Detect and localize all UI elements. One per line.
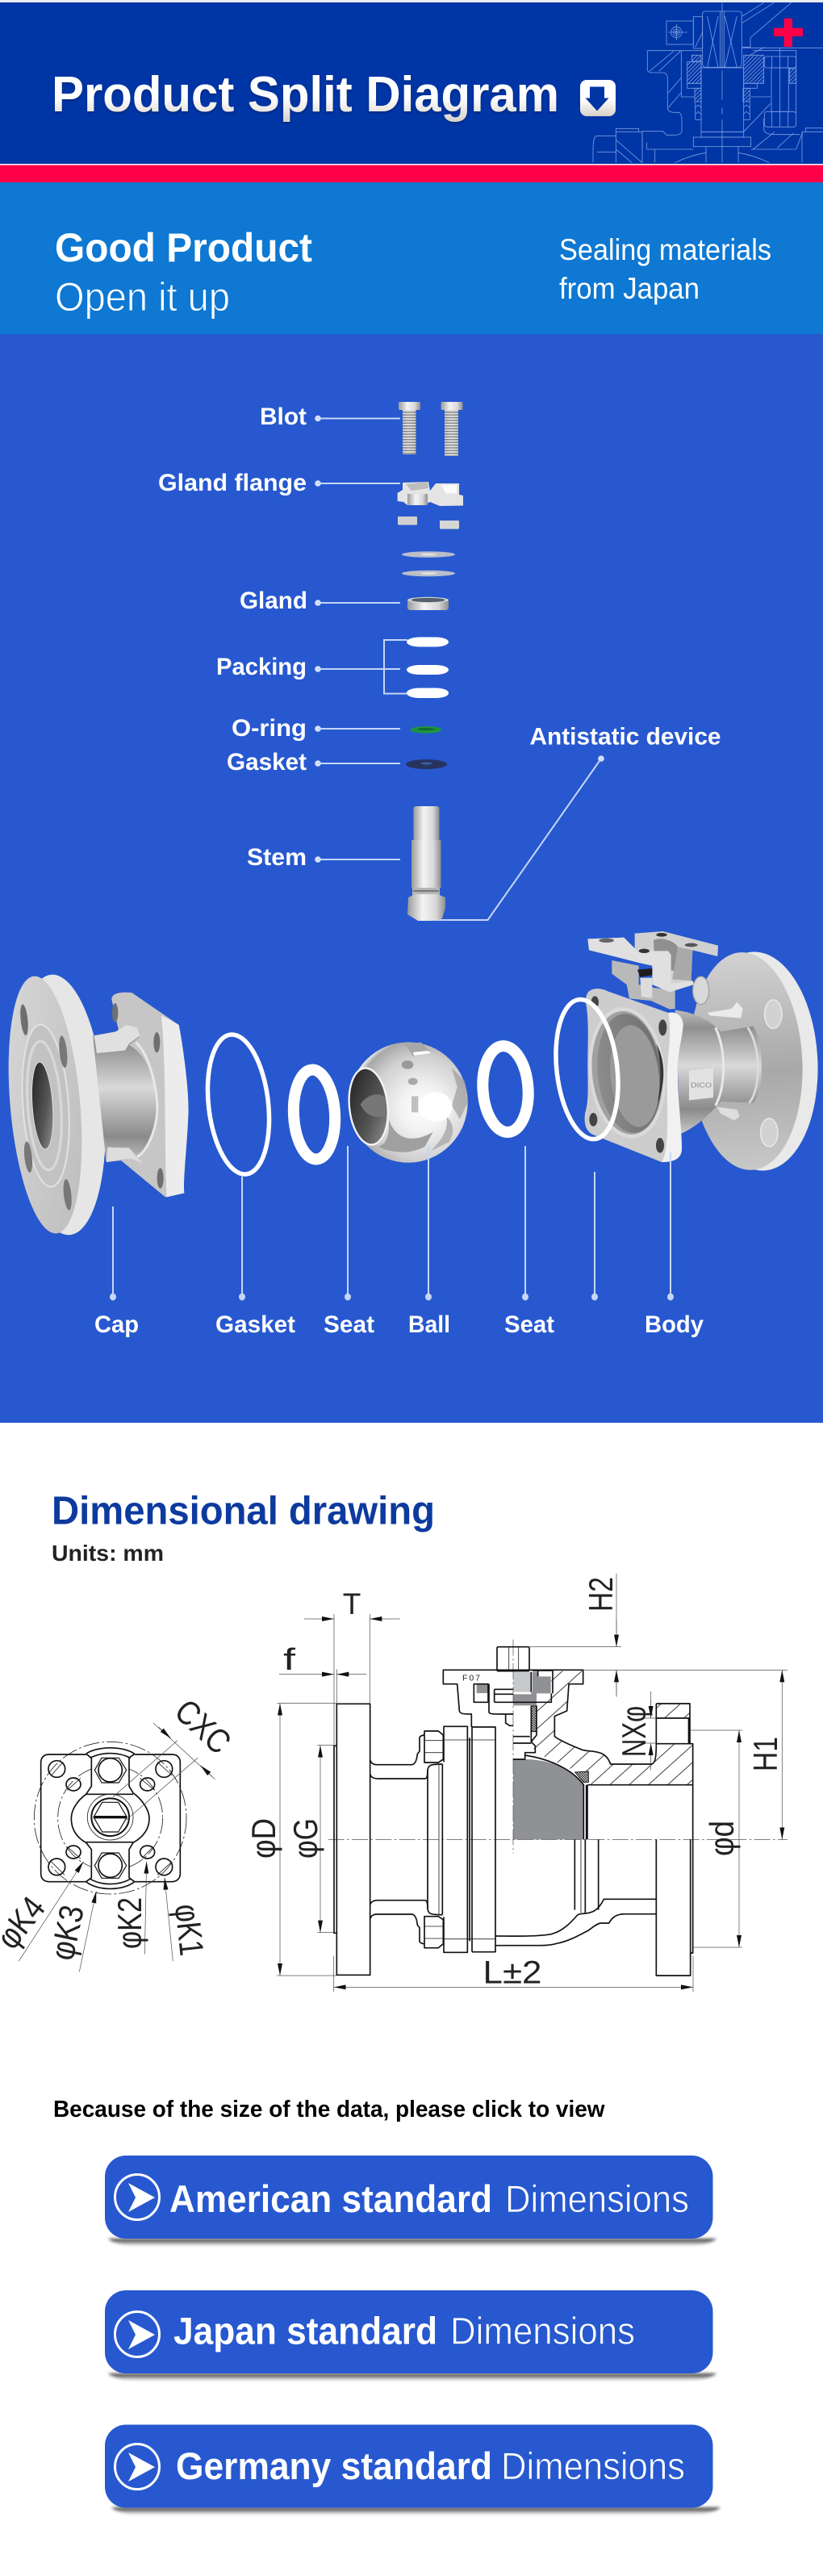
label: Ball: Ball	[408, 1311, 450, 1338]
label: O-ring	[232, 715, 400, 742]
label: Blot	[260, 404, 400, 430]
icon: chevron circle	[115, 2444, 160, 2489]
button: American standard: American standard	[169, 2177, 492, 2220]
part: ball	[345, 1042, 468, 1163]
part: body gasket ring	[549, 996, 625, 1143]
button: Germany standard	[105, 2424, 721, 2515]
part: O-ring	[410, 726, 442, 734]
button: Germany standard: Dimensions	[501, 2444, 685, 2487]
leader: body ring	[594, 1172, 595, 1295]
button: Germany standard: Germany standard	[176, 2444, 492, 2487]
heading: Dimensional drawing: Dimensional drawing	[52, 1490, 435, 1533]
part: nuts	[398, 516, 459, 529]
label: Gasket	[227, 749, 400, 776]
part: bolts	[399, 402, 463, 456]
dim label: CXC: CXC	[168, 1692, 238, 1761]
text: Sealing materials from Japan: from Japan	[559, 272, 700, 305]
leader: Seat right	[524, 1146, 526, 1295]
icon: red plus	[774, 19, 803, 47]
part: gasket ring	[201, 1031, 276, 1177]
part: cap	[0, 972, 189, 1238]
text: click note: Because of the size of the data, please click to view	[53, 2097, 605, 2122]
label: Stem: Stem	[247, 844, 307, 871]
left half outline, upper	[334, 1704, 495, 1839]
button: American standard	[105, 2156, 716, 2246]
leader dots	[110, 1293, 674, 1301]
dim label: T: T	[343, 1587, 361, 1620]
dim label: G: φG	[286, 1818, 324, 1859]
leader: Body	[670, 1152, 671, 1295]
label: O-ring: O-ring	[232, 715, 307, 742]
panel: sub header	[0, 182, 823, 334]
label: Stem	[247, 844, 400, 871]
top works and right body outline	[443, 1647, 693, 1976]
text: F07: F07	[462, 1674, 480, 1683]
dim label: K1: φK1	[168, 1902, 211, 1958]
drawing: flange end view	[0, 1692, 238, 1972]
label: Blot: Blot	[260, 404, 307, 430]
label plate: DICO	[691, 1081, 712, 1089]
text: Units: Units: mm	[52, 1541, 164, 1566]
part: gland ring	[407, 597, 449, 610]
dim label: D: φD	[244, 1818, 282, 1859]
icon: chevron circle	[115, 2311, 160, 2356]
label: Gasket: Gasket	[227, 749, 307, 776]
leader: Seat	[347, 1146, 349, 1295]
part: stem	[407, 806, 445, 921]
dimension lines	[277, 1574, 787, 1992]
button: Japan standard: Japan standard	[173, 2310, 437, 2352]
button: American standard: Dimensions	[505, 2177, 689, 2220]
part: gland flange	[398, 482, 463, 506]
dim label: d: φd	[703, 1821, 741, 1856]
left half outline, mirrored lower	[334, 1839, 495, 1975]
label: Gland: Gland	[240, 588, 307, 614]
leader: Ball	[428, 1146, 429, 1295]
label: Gasket lower: Gasket	[215, 1311, 295, 1338]
label: Antistatic device	[437, 723, 721, 920]
drawing: ball valve section	[244, 1574, 787, 1992]
heading: Good Product: Good Product	[55, 225, 312, 270]
label: Packing: Packing	[216, 654, 307, 680]
dim label: L tolerance: L±2	[483, 1955, 542, 1990]
panel: header banner	[0, 0, 823, 182]
subheading: Open it up: Open it up	[55, 274, 230, 320]
title: Product Split Diagram: Product Split Diagram	[52, 67, 559, 123]
label: Antistatic device: Antistatic device	[529, 723, 721, 751]
blueprint line drawing	[593, 2, 823, 163]
label plate	[689, 1068, 713, 1100]
panel: exploded view	[0, 334, 823, 1423]
dim label: K2: φK2	[111, 1897, 148, 1949]
part: packing rings	[407, 638, 449, 698]
dim label: H2: H2	[582, 1577, 620, 1612]
gray fills	[477, 1671, 693, 1839]
part: seat left	[291, 1068, 337, 1160]
icon: down arrow	[580, 80, 616, 116]
text: Sealing materials from Japan: Sealing materials	[559, 233, 771, 266]
label: Gland flange	[158, 470, 400, 496]
dim label: K3: φK3	[43, 1902, 91, 1963]
button: Japan standard: Dimensions	[450, 2310, 635, 2352]
part: body	[583, 931, 823, 1173]
dim label: f: f	[283, 1643, 296, 1677]
leader: Cap	[112, 1206, 114, 1295]
button: Japan standard	[105, 2290, 716, 2381]
label: Body: Body	[645, 1311, 704, 1338]
dim label: H1: H1	[746, 1737, 784, 1771]
label: Cap: Cap	[94, 1311, 139, 1338]
icon: chevron circle	[115, 2174, 160, 2219]
label: Seat right: Seat	[504, 1311, 554, 1338]
label: Gland	[240, 588, 400, 614]
leader: Gasket	[241, 1177, 243, 1295]
label: Seat: Seat	[324, 1311, 374, 1338]
label: Packing	[216, 640, 407, 694]
part: stem gasket	[406, 759, 447, 769]
part: seat right	[480, 1044, 531, 1134]
label: Gland flange: Gland flange	[158, 470, 307, 496]
text: Sealing materials from Japan	[559, 233, 771, 305]
part: washers	[402, 551, 455, 576]
dim label: NXphi: NXφ	[615, 1706, 653, 1757]
